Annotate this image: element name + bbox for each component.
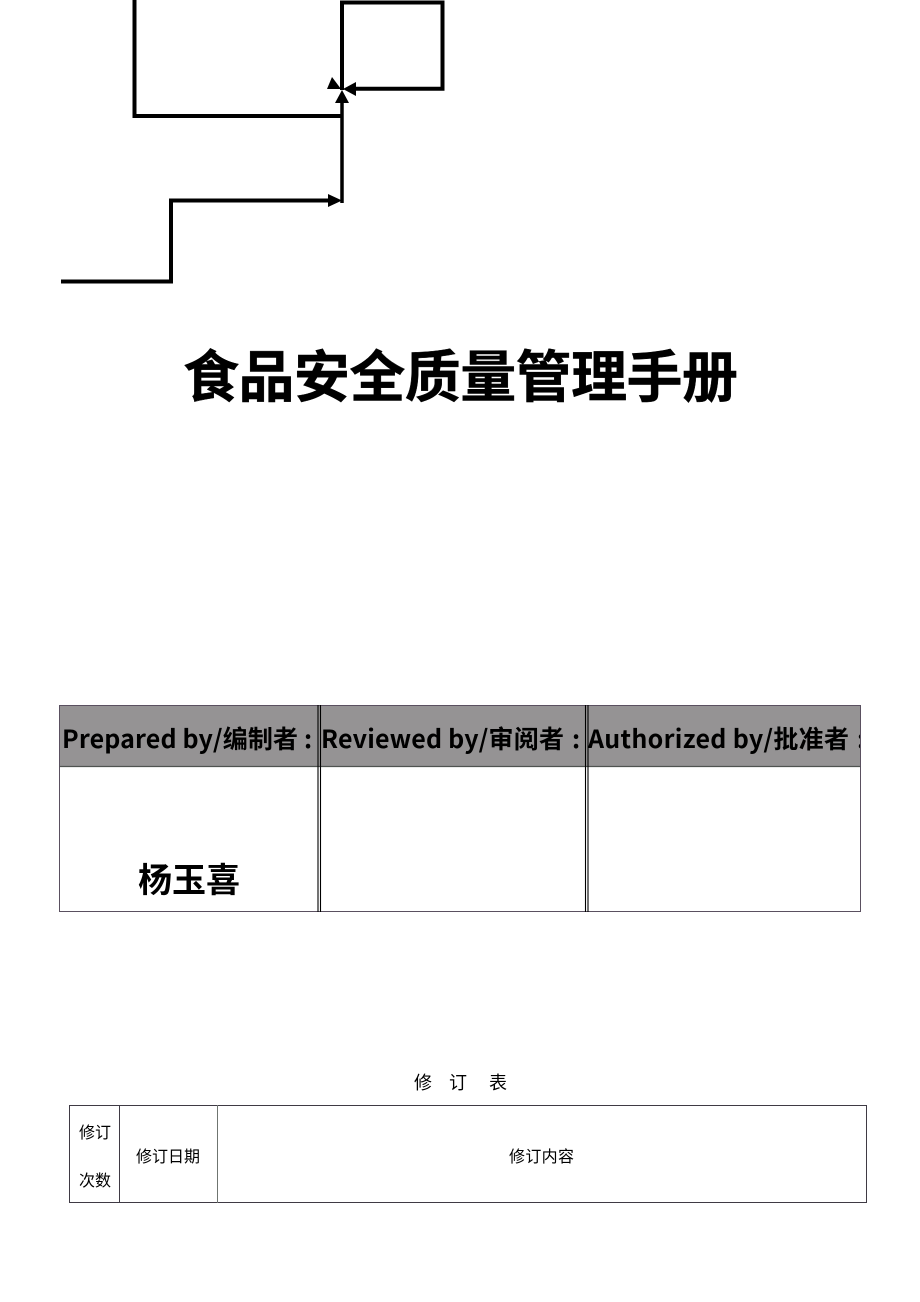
heading: prepared by: : (304, 720, 312, 756)
heading: authorized by: Authorized by/批准者 (587, 720, 849, 756)
panel: revision table (70, 1105, 866, 1203)
column divider: second double rule (586, 705, 588, 912)
connector: left loop line (134, 0, 342, 116)
column header: revision content: 修订内容 (509, 1143, 574, 1167)
heading: prepared by: Prepared by/编制者 (62, 720, 298, 756)
connector: lower step line (61, 200, 334, 282)
heading: revision table title: 修 订 表 (414, 1069, 507, 1095)
heading: reviewed by: Reviewed by/审阅者 (321, 720, 564, 756)
connector: vertical riser (340, 98, 344, 203)
arrowhead: small upper left (327, 77, 341, 89)
column divider one (118, 1105, 120, 1203)
column divider: first double rule (318, 705, 320, 912)
arrowhead: up-pointing center (335, 90, 349, 103)
column header: revision number line 1: 修订 (79, 1119, 111, 1143)
arrowhead: right-pointing lower (328, 194, 342, 207)
heading: authorized by: : (857, 720, 865, 756)
preparer name: 杨玉喜 (138, 853, 240, 902)
column header: revision date: 修订日期 (136, 1143, 200, 1167)
column header: revision number line 2: 次数 (79, 1167, 111, 1191)
flow diagram: connector lines and arrows (61, 0, 442, 282)
title: 食品安全质量管理手册 (183, 333, 738, 414)
table header rule (60, 766, 860, 768)
arrowhead: left-pointing center (343, 82, 356, 96)
panel: approval table (60, 705, 865, 912)
heading: reviewed by: : (572, 720, 580, 756)
table outline (60, 706, 860, 912)
connector: right feedback box (342, 2, 442, 90)
column divider two (216, 1105, 218, 1203)
table outline (70, 1106, 866, 1202)
table header background (60, 706, 860, 766)
